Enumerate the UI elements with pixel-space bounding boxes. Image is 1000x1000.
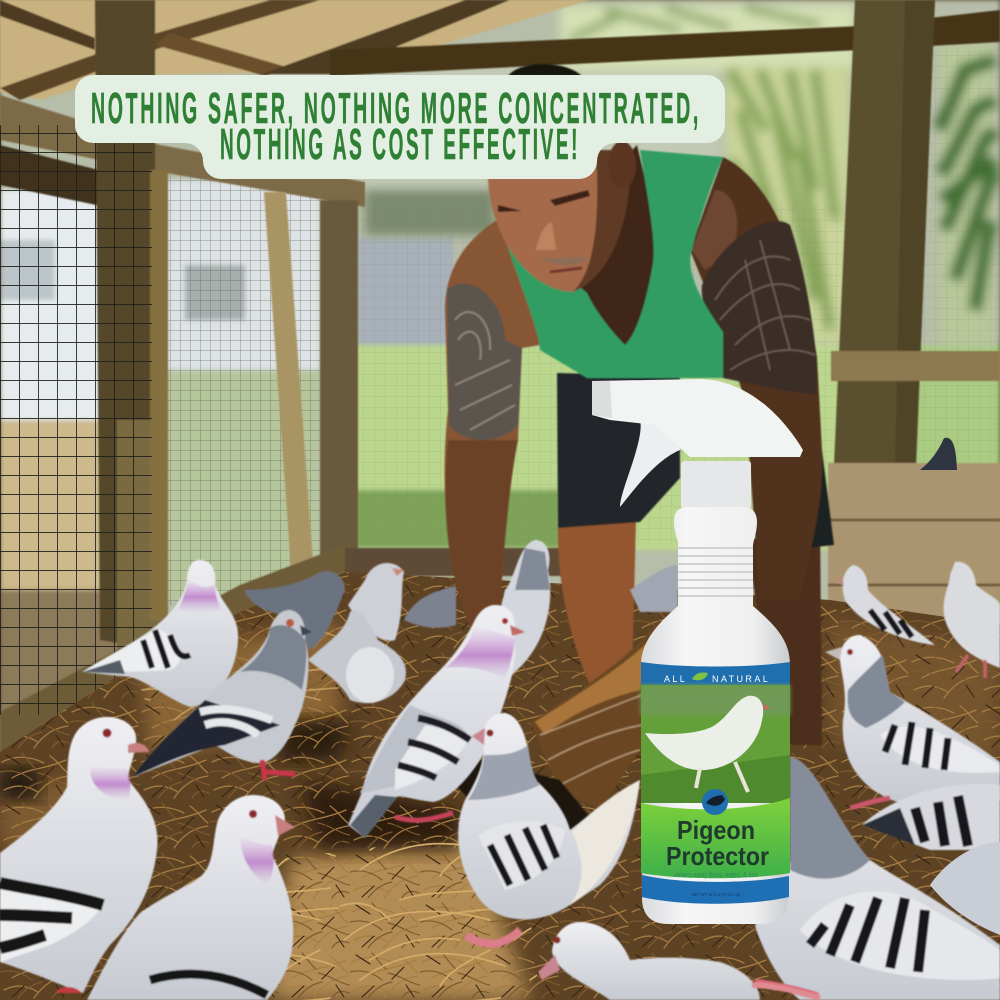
pigeon: wing far right	[862, 784, 1000, 850]
leg right	[750, 520, 822, 745]
left houses	[0, 180, 320, 720]
top band	[641, 662, 790, 685]
bottom rail left	[0, 545, 345, 758]
green panel: cleans away fleas, mites, & lice	[674, 872, 758, 879]
bottom band	[642, 875, 789, 904]
upper left wall beams	[0, 95, 365, 207]
shorts	[557, 373, 834, 550]
pigeon flock back row	[82, 540, 1000, 780]
green panel: Protector	[666, 841, 769, 871]
pigeon: near centre back	[308, 611, 406, 703]
mesh fence panels	[165, 50, 1000, 605]
hair	[508, 64, 582, 76]
tattoo left	[447, 284, 522, 440]
pigeon: bottom centre	[538, 922, 820, 1000]
wooden posts and boards	[0, 0, 1000, 758]
pigeon: right back	[835, 565, 935, 645]
sky and palms	[345, 5, 995, 345]
chest skin	[540, 145, 665, 360]
man	[445, 64, 834, 745]
pigeon: front left	[0, 717, 158, 993]
pigeon: behind bottle	[630, 565, 678, 612]
product bottle	[592, 379, 803, 924]
label dove	[645, 696, 770, 792]
pigeon: dark back	[244, 571, 345, 650]
green tank top	[497, 150, 723, 378]
pigeon: right large	[825, 635, 1000, 808]
pigeon: pale far right	[930, 842, 1000, 935]
pigeon: front second	[87, 795, 295, 1000]
tattoo right	[702, 221, 817, 395]
crate	[828, 463, 1000, 628]
roof structure	[0, 0, 1000, 212]
sprayer	[592, 379, 803, 507]
bottle body	[641, 507, 790, 924]
green panel	[641, 798, 790, 879]
top band: ALL	[664, 674, 687, 684]
arm near	[445, 220, 540, 632]
pigeon: tall centre	[495, 540, 550, 680]
pigeon: lower right	[755, 757, 1000, 1000]
neck ribs	[678, 548, 753, 596]
leg left	[558, 520, 636, 685]
banner shape	[75, 75, 725, 179]
head	[488, 141, 636, 292]
top band: NATURAL	[712, 674, 770, 684]
small dark pigeon on crate	[920, 438, 957, 470]
grey house	[358, 238, 453, 346]
pigeon: front centre	[458, 713, 640, 944]
label	[641, 662, 790, 904]
green panel: Pigeon	[677, 815, 755, 845]
label photo	[641, 685, 790, 803]
bird logo	[702, 789, 728, 815]
pigeon: pale back	[348, 563, 404, 641]
callout banner	[75, 75, 725, 179]
post: left main	[95, 0, 168, 645]
rail	[831, 351, 1000, 381]
post: mid	[320, 200, 358, 570]
post: diagonal	[264, 192, 314, 582]
straw floor	[0, 572, 1000, 1000]
bottom band: NET WT 16 fl oz (473.1 ml)	[692, 892, 740, 897]
pigeon: centre large	[348, 605, 525, 838]
collar	[681, 461, 751, 509]
left mesh in front	[0, 125, 152, 715]
post: right main	[834, 0, 935, 465]
pigeon: left second	[133, 610, 312, 780]
coconut fibre mound	[450, 618, 660, 830]
arm far	[690, 157, 822, 600]
pigeon: grey tiny	[404, 586, 456, 628]
pigeon: left upper	[82, 560, 238, 715]
pigeon: far right standing	[944, 562, 1000, 678]
lawn	[168, 345, 1000, 600]
